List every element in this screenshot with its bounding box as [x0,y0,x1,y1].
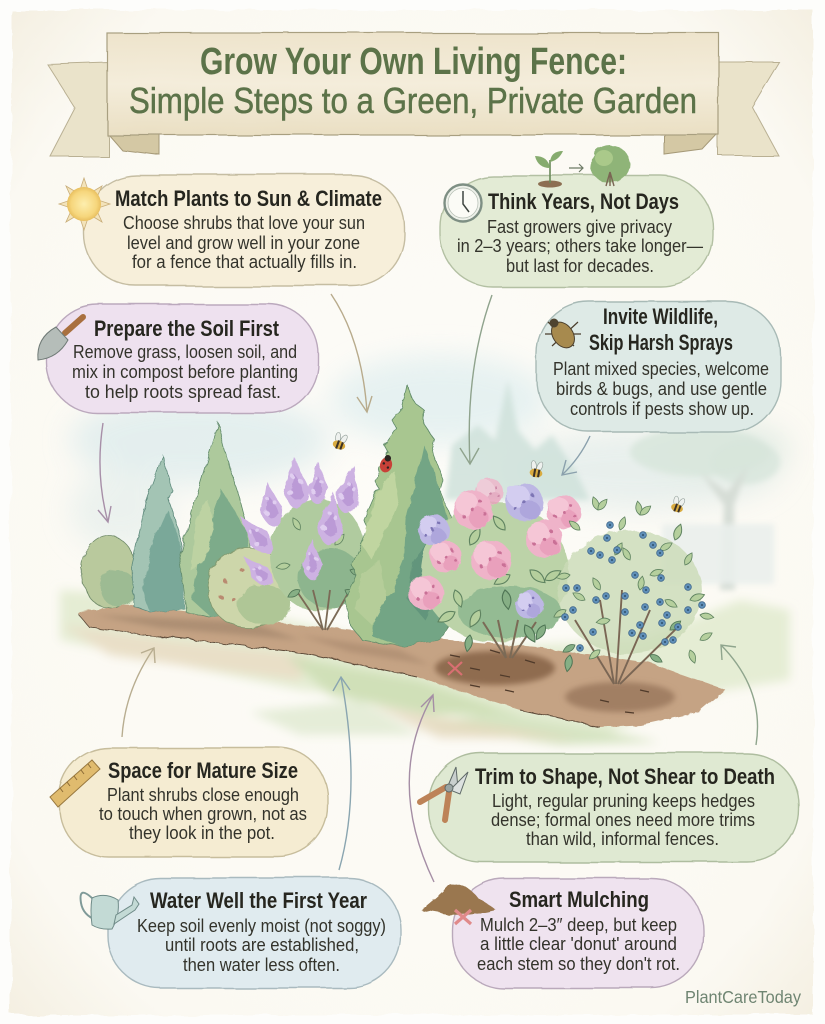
heading: Water Well the First Year [150,888,367,913]
panel: water well [81,878,401,988]
bee two [528,460,544,478]
heading: Prepare the Soil First [94,316,279,341]
body text: than wild, informal fences. [526,828,719,849]
body text: to touch when grown, not as [99,803,307,824]
title: Grow Your Own Living Fence: [200,41,627,83]
body text: Remove grass, loosen soil, and [73,341,297,362]
bubble [537,302,780,432]
brand credit: PlantCareToday [685,987,801,1007]
heading: Skip Harsh Sprays [589,330,733,355]
heading: Smart Mulching [509,887,649,912]
garden illustration [60,355,790,745]
lilac stems [296,590,350,630]
icon: sun [59,178,110,230]
body text: Plant mixed species, welcome [553,358,769,379]
heading: Invite Wildlife, [603,304,718,329]
body text: birds & bugs, and use gentle [556,378,767,399]
icon: beetle [545,318,581,352]
shrub: yellow-green round [207,548,291,628]
body text: until roots are established, [165,934,359,955]
bubble [108,878,401,988]
arrow: mulch [409,695,434,882]
ladybug [378,454,394,474]
body text: Mulch 2–3″ deep, but keep [480,914,677,935]
body text: Keep soil evenly moist (not soggy) [137,915,386,936]
hydrangea leaves [436,514,563,652]
icon: watering can [81,893,139,929]
sky washes [70,355,790,550]
lilac blooms [232,456,366,591]
banner [47,33,779,156]
mulch bed [78,604,726,727]
arrow: spacing [122,648,155,737]
blueberry leaves [552,496,714,672]
body text [72,341,298,402]
shrub: round left [82,536,136,608]
distant trees [445,380,780,590]
blueberry stems [575,590,680,684]
arrow: wildlife [562,436,590,475]
body text [123,212,365,272]
shrub: hydrangea [408,478,580,658]
body text: Choose shrubs that love your sun [123,212,365,233]
shrub: green conifer [180,423,253,618]
heading: Match Plants to Sun & Climate [115,186,382,211]
icon: seedling to bush [535,145,630,188]
panel: prepare the soil [38,304,318,413]
banner tails [47,62,779,156]
heading [589,304,733,355]
arrow: water [333,677,351,870]
heading: Space for Mature Size [108,758,298,783]
banner main ribbon [107,33,719,135]
panel: smart mulching [421,878,703,988]
body text: dense; formal ones need more trims [491,809,755,830]
shrub: big conifer [346,385,457,646]
body text [491,790,755,849]
bubble [47,304,318,413]
icon: ruler [50,760,100,807]
body text: but last for decades. [506,255,654,276]
body text: each stem so they don't rot. [477,953,680,974]
body text [99,784,307,843]
body text: mix in compost before planting [72,361,298,382]
arrow: soil to bed [98,423,111,522]
panel: match plants to sun [59,175,404,286]
panel: trim to shape [420,753,799,862]
bee three [669,495,687,514]
bee one [331,431,349,451]
icon: pruners [420,767,468,820]
hydrangea stems [483,620,536,658]
title: Simple Steps to a Green, Private Garden [129,80,697,121]
icon: clock [444,184,482,222]
panel: invite wildlife [537,302,780,432]
body text: Fast growers give privacy [487,216,673,237]
arrow: sun to shrubs [331,294,372,412]
bubble [84,175,404,286]
bubble [59,748,328,857]
body text [477,914,680,974]
heading: Think Years, Not Days [488,189,679,214]
shrub: lilac [232,456,366,630]
blueberries [562,522,705,651]
shrub: blueberry [552,496,714,684]
body text: controls if pests show up. [570,398,754,419]
bubble [429,753,799,862]
lilac leaves [276,516,364,600]
icon: trowel [38,317,83,360]
hydrangea foliage [421,502,569,642]
blueberry wash [558,530,702,654]
body text [137,915,386,975]
panel: think years [441,145,713,287]
mulch red x [448,662,462,675]
body text: Plant shrubs close enough [107,784,299,805]
body text: to help roots spread fast. [85,381,281,402]
body text [553,358,769,419]
body text: Light, regular pruning keeps hedges [492,790,755,811]
body text: for a fence that actually fills in. [132,251,357,272]
body text: they look in the pot. [129,822,275,843]
panel: space for mature size [50,748,328,857]
body text: then water less often. [183,954,340,975]
fence [662,524,774,584]
body text [457,216,703,276]
body text: a little clear 'donut' around [480,933,677,954]
hydrangea blooms [408,478,580,619]
bubble [452,878,703,988]
shrub: teal conifer [132,455,184,612]
bubble [441,176,713,287]
arrow: trim [721,645,758,745]
body text: in 2–3 years; others take longer— [457,235,703,256]
lilac foliage [270,499,366,611]
arrow: time to shrubs [460,295,492,464]
title [129,41,697,121]
icon: mulch pile [421,884,496,924]
body text: level and grow well in your zone [127,232,360,253]
lawn [60,590,790,745]
